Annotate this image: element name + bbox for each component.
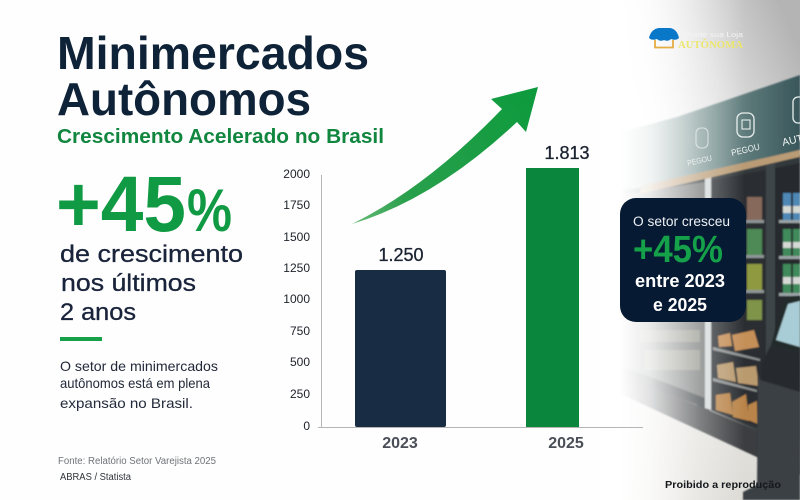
y axis labels: 2000 bbox=[283, 167, 310, 181]
signage labels bbox=[686, 97, 800, 168]
category labels: 2023 bbox=[382, 435, 418, 452]
source: Fonte: Relatório Setor Varejista 2025 bbox=[58, 456, 216, 467]
store photo bbox=[600, 0, 800, 500]
kick plate bbox=[608, 383, 757, 457]
stat description: de crescimento bbox=[60, 241, 243, 268]
y axis labels: 1250 bbox=[283, 261, 310, 275]
y axis labels: 1500 bbox=[283, 230, 310, 244]
logo bbox=[649, 28, 744, 51]
payment kiosk bbox=[743, 296, 800, 500]
title: Minimercados bbox=[57, 27, 369, 79]
white fade over photo bbox=[600, 0, 745, 500]
growth arrow bbox=[352, 87, 538, 224]
description: expansão no Brasil. bbox=[60, 395, 193, 411]
category labels: 2025 bbox=[548, 435, 584, 452]
y axis labels bbox=[283, 167, 310, 433]
callout: entre 2023 bbox=[635, 271, 725, 291]
description: O setor de minimercados bbox=[60, 358, 218, 374]
description: autônomos está em plena bbox=[60, 375, 210, 391]
value labels bbox=[378, 143, 590, 265]
breads bbox=[718, 330, 759, 351]
value labels: 1.250 bbox=[378, 245, 424, 265]
bar 2025 bbox=[526, 168, 579, 427]
stat: +45%: +45 bbox=[56, 159, 186, 248]
callout bbox=[620, 198, 746, 322]
source bbox=[58, 456, 216, 483]
stat description: 2 anos bbox=[60, 299, 136, 326]
stat description bbox=[60, 241, 243, 326]
signage labels: PEGOU bbox=[730, 142, 761, 158]
bar chart bbox=[283, 143, 643, 452]
accent divider bbox=[60, 337, 102, 341]
source: ABRAS / Statista bbox=[60, 472, 131, 483]
category labels bbox=[382, 435, 584, 452]
y axis labels: 750 bbox=[290, 324, 310, 338]
bottles right bbox=[783, 193, 800, 220]
y axis labels: 0 bbox=[303, 419, 310, 433]
bottles left bbox=[747, 197, 762, 220]
y axis labels: 500 bbox=[290, 355, 310, 369]
description bbox=[60, 358, 218, 411]
stat description: nos últimos bbox=[61, 270, 196, 297]
copyright notice: Proibido a reprodução bbox=[665, 479, 781, 491]
axes bbox=[318, 175, 643, 428]
title: Autônomos bbox=[57, 73, 311, 125]
bar 2023 bbox=[355, 270, 446, 427]
y axis labels: 1000 bbox=[283, 292, 310, 306]
subtitle: Crescimento Acelerado no Brasil bbox=[57, 126, 384, 148]
stat: +45%: % bbox=[187, 177, 232, 244]
signage band bbox=[617, 75, 800, 194]
logo: Monte sua Loja bbox=[683, 30, 744, 39]
left fridge shelves bbox=[640, 330, 700, 370]
refrigerators bbox=[605, 155, 800, 475]
title bbox=[57, 27, 369, 125]
callout: e 2025 bbox=[653, 295, 707, 315]
logo: AUTÔNOMA bbox=[678, 38, 743, 51]
signage labels: PEGOU bbox=[686, 154, 713, 168]
value labels: 1.813 bbox=[544, 143, 590, 163]
y axis labels: 1750 bbox=[283, 198, 310, 212]
callout: +45% bbox=[633, 229, 723, 271]
y axis labels: 250 bbox=[290, 387, 310, 401]
callout: O setor cresceu bbox=[633, 214, 730, 229]
